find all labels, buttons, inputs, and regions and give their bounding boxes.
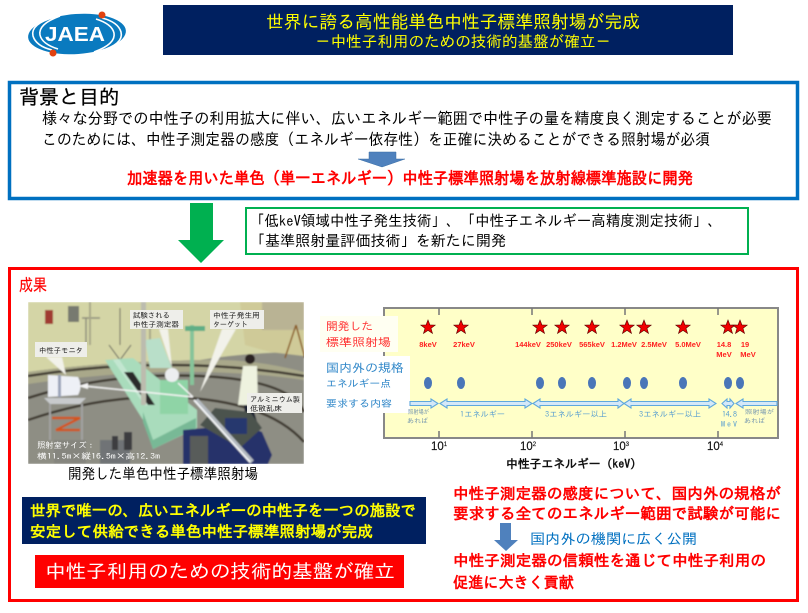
range labels: MeV [721,420,737,428]
range labels: 14.8 [722,410,737,418]
range labels: 照射場が [408,408,429,415]
energy labels: 1.2MeV [611,340,637,349]
photo: irradiation facility [28,302,305,464]
callout: world-unique facility [22,497,426,544]
axis tick labels: 2 [533,442,537,448]
callout: technical foundation [35,555,404,588]
energy labels: 250keV [546,340,572,349]
heading: results: 成果 [19,276,47,294]
callout: world-unique facility: 世界で唯一の、広いエネルギーの中性子を一つの施設で [30,502,416,518]
callout: development goal: 加速器を用いた単色（単一エネルギー）中性子標準照射場を放射線標準施設に開発 [127,169,693,186]
axis tick labels: 1 [444,442,448,448]
target stand [185,326,205,331]
logo: JAEA: JAEA [45,24,105,46]
arrow: green down [178,203,224,263]
callout: new technologies: 「低keV領域中性子発生技術」、「中性子エネルギー高精度測定技術」、 [250,213,722,228]
photo caption: 開発した単色中性子標準照射場 [68,466,258,481]
leader wedges [159,329,172,368]
energy labels: MeV [740,350,756,359]
energy labels: MeV [716,350,732,359]
person [245,354,255,364]
row labels [320,316,410,413]
photo labels: アルミニウム製 [250,395,300,403]
energy labels: 144keV [515,340,541,349]
photo labels: 中性子発生用 [213,311,260,320]
photo labels: 照射室サイズ： [37,441,95,449]
title banner [163,5,733,55]
callout: new technologies [246,208,748,254]
axis tick labels: 10 [431,441,444,453]
photo labels [35,310,302,461]
text block: contribution: 中性子測定器の信頼性を通じて中性子利用の [453,552,766,568]
sphere [165,368,179,382]
photo labels: 低散乱床 [250,404,283,413]
heading: background and purpose: 背景と目的 [19,87,119,107]
chart plot area [384,308,778,438]
text block: contribution [453,552,766,590]
callout: technical foundation: 中性子利用のための技術的基盤が確立 [45,561,395,581]
panel: results [10,268,798,600]
energy labels: 14.8 [717,340,731,349]
row labels: 標準照射場 [326,336,391,348]
energy labels: 2.5MeV [641,340,667,349]
energy labels: 5.0MeV [675,340,701,349]
range labels: 1エネルギー [460,410,505,418]
arrow: down [358,152,405,167]
range labels: あれば [744,417,766,424]
monitor [48,375,80,397]
row labels: 開発した [326,321,373,332]
axis title: 中性子エネルギー（keV） [506,457,642,470]
callout: world-unique facility: 安定して供給できる単色中性子標準照射場が完成 [30,523,373,539]
green table [105,358,197,449]
row labels: エネルギー点 [326,378,391,389]
photo labels: 試験される [133,311,170,320]
axis tick labels: 4 [720,442,724,448]
text block: wide publication: 国内外の機関に広く公開 [530,531,697,546]
energy labels: 565keV [579,340,605,349]
panel: background and purpose [10,82,798,198]
row labels: 国内外の規格 [326,362,404,374]
range labels: あれば [407,417,429,424]
text block: background: このためには、中性子測定器の感度（エネルギー依存性）を正確に決めることができる照射場が必須 [42,131,710,147]
text block: contribution: 促進に大きく貢献 [453,574,574,590]
energy labels [419,340,756,359]
range labels [407,408,775,428]
equipment [182,427,272,464]
text block: test capability: 中性子測定器の感度について、国内外の規格が [453,485,782,501]
axis tick labels: 3 [626,442,630,448]
chart: neutron energy points [320,308,778,470]
text block: background [42,110,772,147]
beam arrows [84,386,193,397]
energy labels: 27keV [453,340,475,349]
photo labels: 中性子測定器 [133,320,180,329]
text block: test capability [453,485,782,521]
range labels: 3エネルギー以上 [639,410,701,418]
energy labels: 8keV [419,340,437,349]
range labels: 照射場が [745,408,775,415]
range labels: 3エネルギー以上 [545,410,607,418]
arrow: down to contribution [494,523,518,551]
row labels: 要求する内容 [326,399,392,409]
standard points [424,377,744,389]
axis tick labels: 10 [520,441,533,453]
text block: background: 様々な分野での中性子の利用拡大に伴い、広いエネルギー範囲で中性子の量を精度良く測定することが必要 [42,110,772,126]
logo: JAEA [27,11,127,57]
axis tick labels: 10 [613,441,626,453]
photo labels: ターゲット [213,320,248,328]
requirement range arrows [410,399,777,408]
title banner: 世界に誇る高性能単色中性子標準照射場が完成 [266,12,640,31]
axis tick labels: 10 [707,441,720,453]
energy labels: 19 [741,340,749,349]
photo labels: 横11.5m×縦16.5m×高12.3m [37,452,160,461]
photo labels: 中性子モニタ [39,346,83,354]
title banner: －中性子利用のための技術的基盤が確立－ [315,33,611,49]
text block: test capability: 要求する全てのエネルギー範囲で試験が可能に [453,505,781,521]
axis tick labels [431,441,724,453]
stars: developed fields [421,320,747,333]
callout: new technologies: 「基準照射量評価技術」を新たに開発 [250,233,506,248]
